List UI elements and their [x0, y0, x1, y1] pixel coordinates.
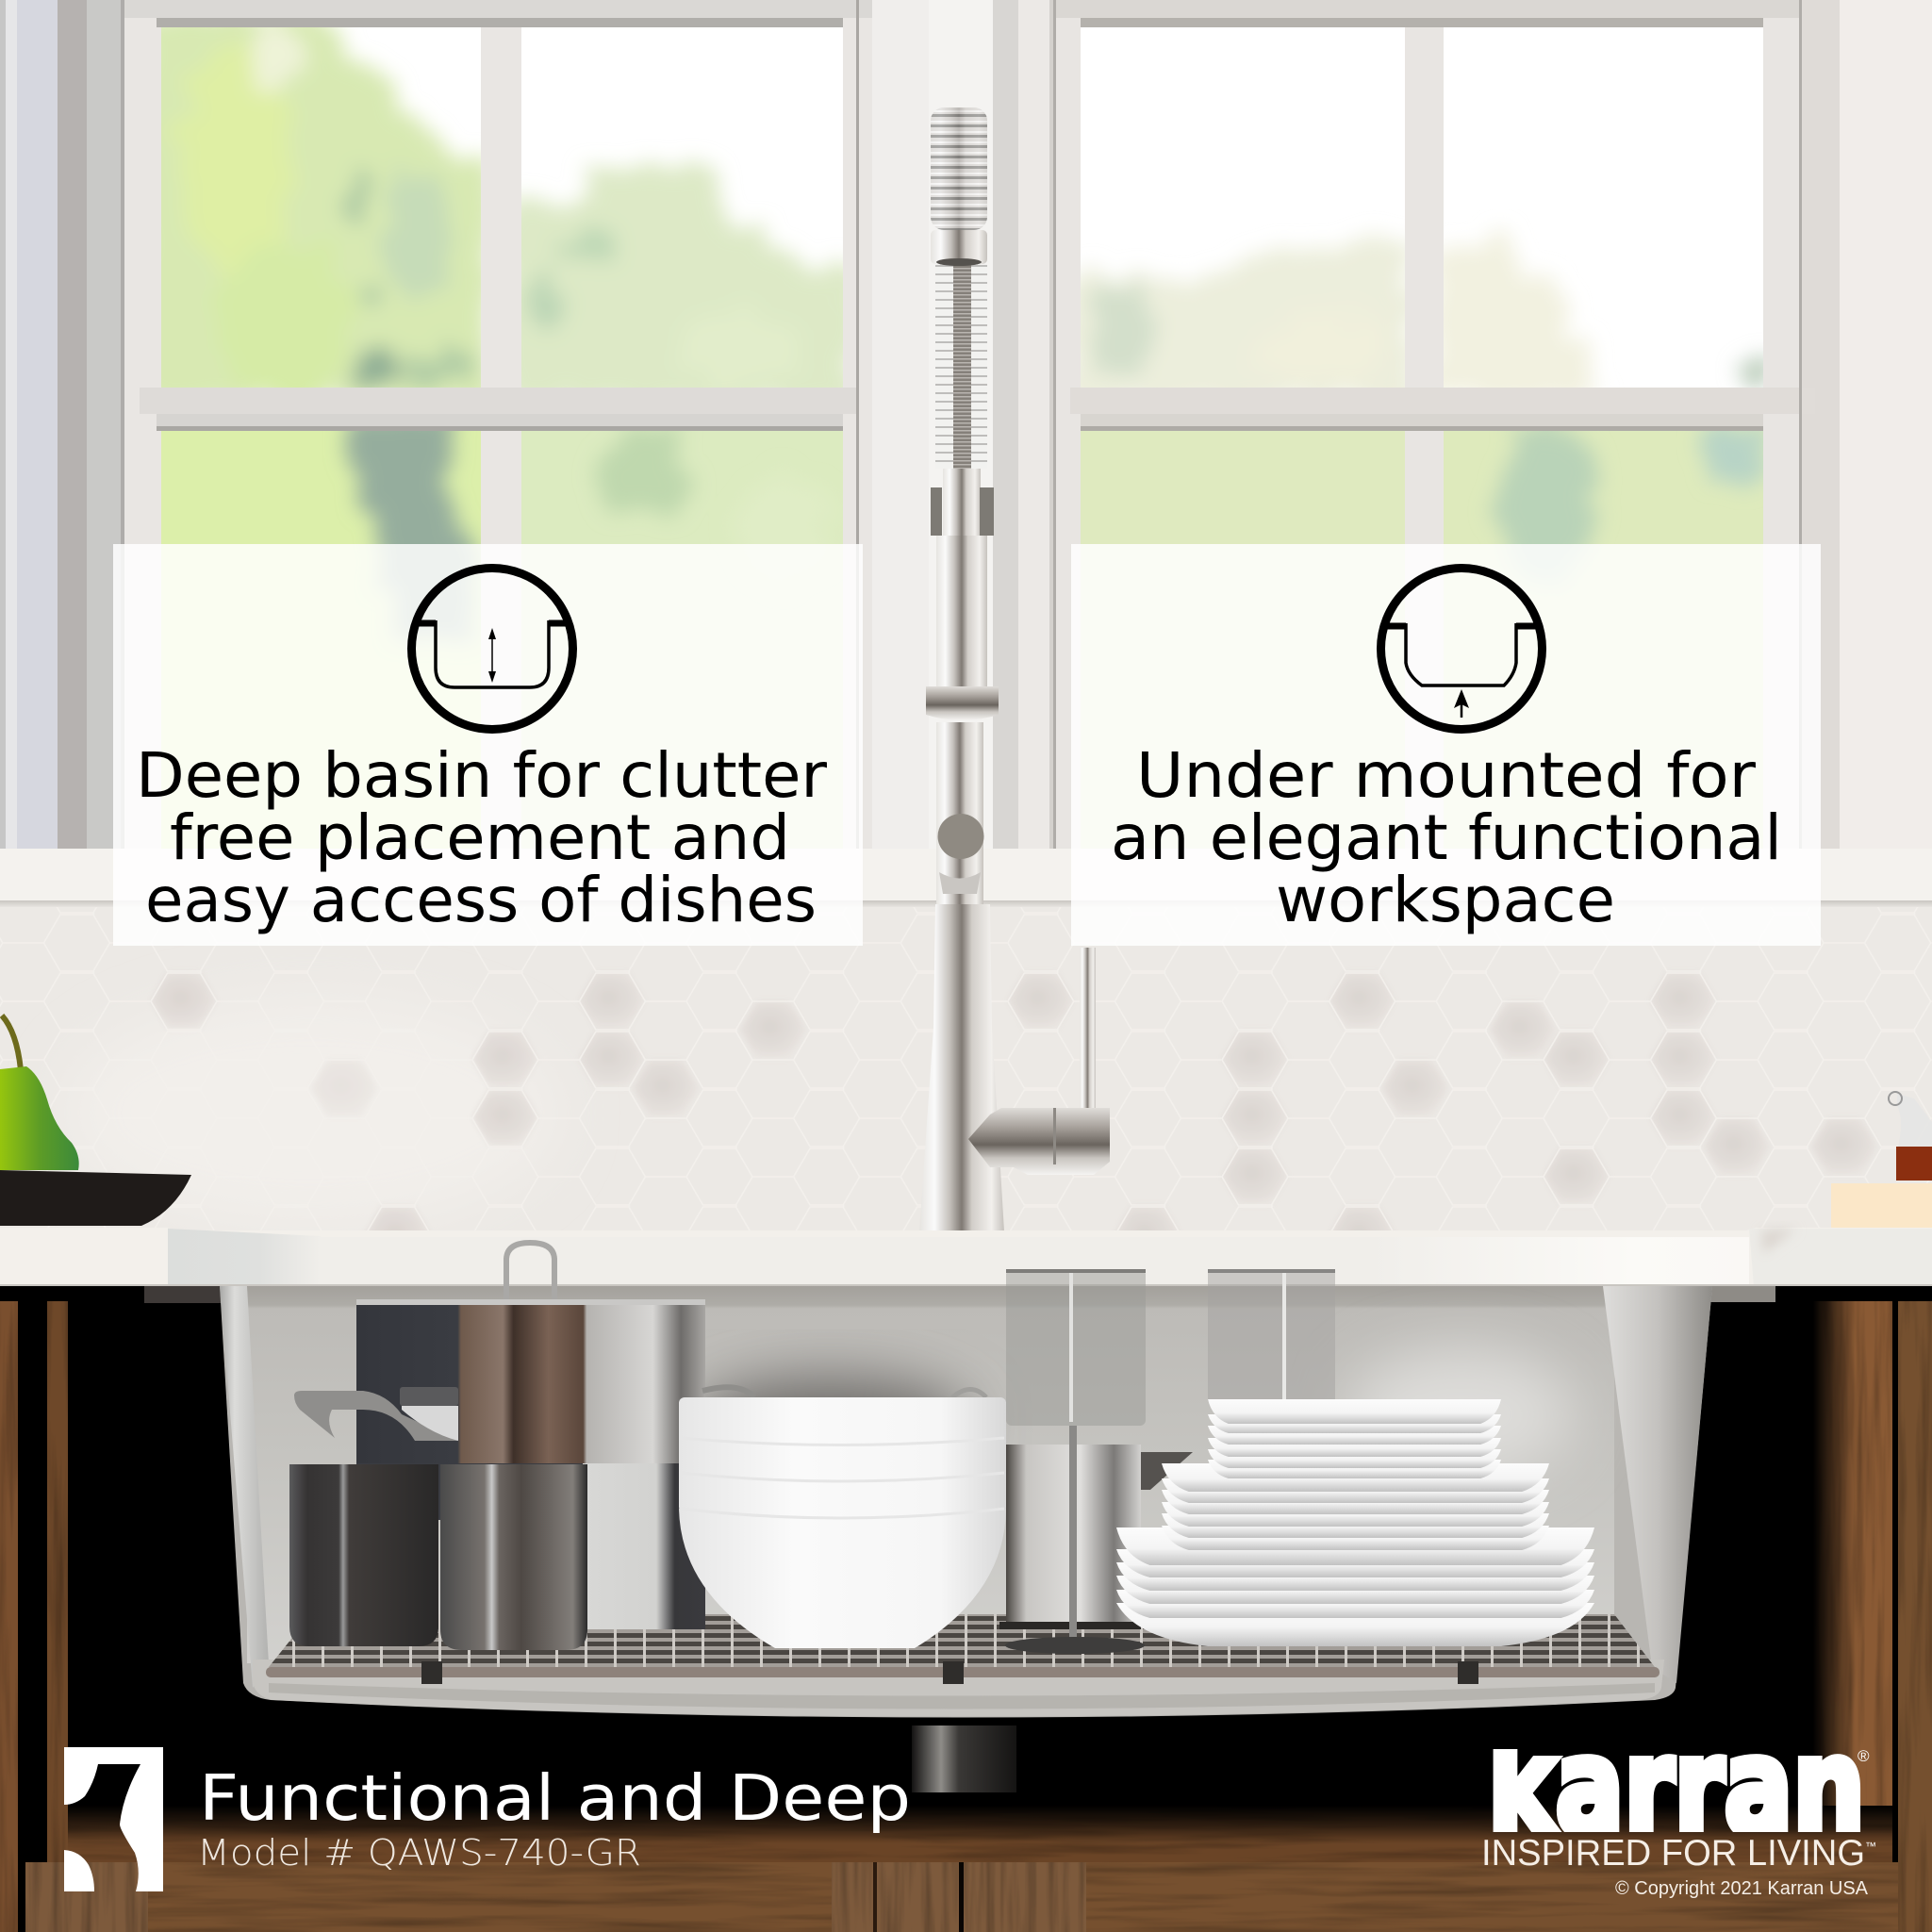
drain pipe — [912, 1726, 1016, 1792]
left window — [121, 0, 872, 849]
window pane lower left — [161, 415, 481, 849]
wood rail — [68, 1806, 1892, 1862]
text: under mounted description: workspace — [1276, 864, 1615, 936]
rack clips — [421, 1661, 442, 1684]
back wall — [247, 1286, 1614, 1663]
faucet clips — [931, 487, 942, 536]
right wall — [1603, 1286, 1712, 1683]
carafe — [1897, 1094, 1932, 1181]
faucet handle — [968, 1108, 1110, 1175]
icon: under mount arrow — [1380, 568, 1543, 730]
sink lips — [144, 1286, 224, 1303]
black bowl — [0, 1170, 191, 1226]
logo tagline: INSPIRED FOR LIVING — [1481, 1833, 1865, 1874]
wine glass — [1005, 1269, 1146, 1654]
model number: Model # QAWS-740-GR — [197, 1832, 641, 1874]
pot side handle — [294, 1387, 458, 1441]
countertop — [0, 1228, 1932, 1286]
window sill — [0, 849, 1932, 908]
spray head — [931, 107, 987, 230]
small pot — [999, 1445, 1193, 1629]
faucet spring — [935, 265, 987, 469]
carafe oil — [1896, 1147, 1932, 1181]
plate stack small — [1208, 1399, 1501, 1478]
wooden board — [1831, 1183, 1932, 1228]
sink outer shell — [220, 1286, 1712, 1718]
text: deep basin description: Deep basin for clutter — [136, 739, 828, 812]
logo trademark: ™ — [1865, 1840, 1876, 1853]
text: under mounted description — [1111, 739, 1782, 936]
wire rack grid — [269, 1614, 1655, 1667]
text: deep basin description: easy access of dishes — [145, 864, 817, 936]
pear stem — [2, 1016, 21, 1070]
hexagon marble backsplash — [0, 907, 1932, 1263]
window pane upper right — [1428, 27, 1773, 396]
left wall — [220, 1286, 269, 1688]
plate stack medium — [1162, 1463, 1549, 1550]
cabinet and black cavity — [0, 1286, 1932, 1932]
window pane upper left — [161, 27, 481, 388]
pear — [0, 1066, 79, 1170]
wall and window trim — [0, 0, 1932, 905]
window pane lower right — [521, 431, 843, 544]
cutting board and oil carafe — [1831, 1092, 1932, 1228]
plate stack large — [1116, 1527, 1594, 1646]
icon: deep basin depth — [411, 568, 573, 730]
sink floor — [253, 1660, 1664, 1716]
window pane upper left — [1081, 27, 1405, 388]
window pane upper right — [521, 27, 843, 388]
window pane lower left — [1081, 431, 1405, 544]
Karran logo — [1484, 1749, 1875, 1865]
stock pot — [356, 1243, 705, 1629]
wood stile left — [0, 1301, 18, 1932]
faucet lever — [1080, 948, 1096, 1110]
pot rear handles — [702, 1387, 986, 1397]
text: deep basin description — [136, 739, 828, 936]
window pane lower right — [1444, 431, 1763, 544]
dark drinking glass two — [440, 1464, 587, 1650]
wood panels — [25, 1862, 148, 1932]
tall glass — [1208, 1269, 1335, 1401]
title: Functional and Deep: Functional and Deep — [199, 1761, 911, 1835]
logo registered mark: ® — [1858, 1747, 1870, 1765]
faucet ring — [926, 686, 999, 720]
faucet body — [936, 722, 983, 904]
icon: Karran K monogram — [64, 1747, 163, 1891]
pear and dark bowl — [0, 1016, 191, 1226]
panel: under mounted — [1071, 544, 1821, 946]
panel: deep basin — [113, 544, 863, 946]
stacked white bowls — [679, 1397, 1006, 1648]
right window — [1053, 0, 1815, 849]
dark drinking glass one — [289, 1464, 438, 1646]
plate stacks — [1116, 1399, 1594, 1646]
sink basin — [144, 1243, 1775, 1718]
text: under mounted description: Under mounted for — [1136, 739, 1757, 812]
wire rack front bar — [266, 1661, 1660, 1684]
copyright: © Copyright 2021 Karran USA — [1615, 1878, 1869, 1899]
wood stile right — [1813, 1301, 1892, 1867]
text: deep basin description: free placement and — [170, 801, 790, 874]
faucet base cone — [919, 904, 1004, 1231]
faucet — [919, 107, 1110, 1231]
faucet control knob — [937, 814, 984, 859]
text: under mounted description: an elegant functional — [1111, 801, 1782, 874]
